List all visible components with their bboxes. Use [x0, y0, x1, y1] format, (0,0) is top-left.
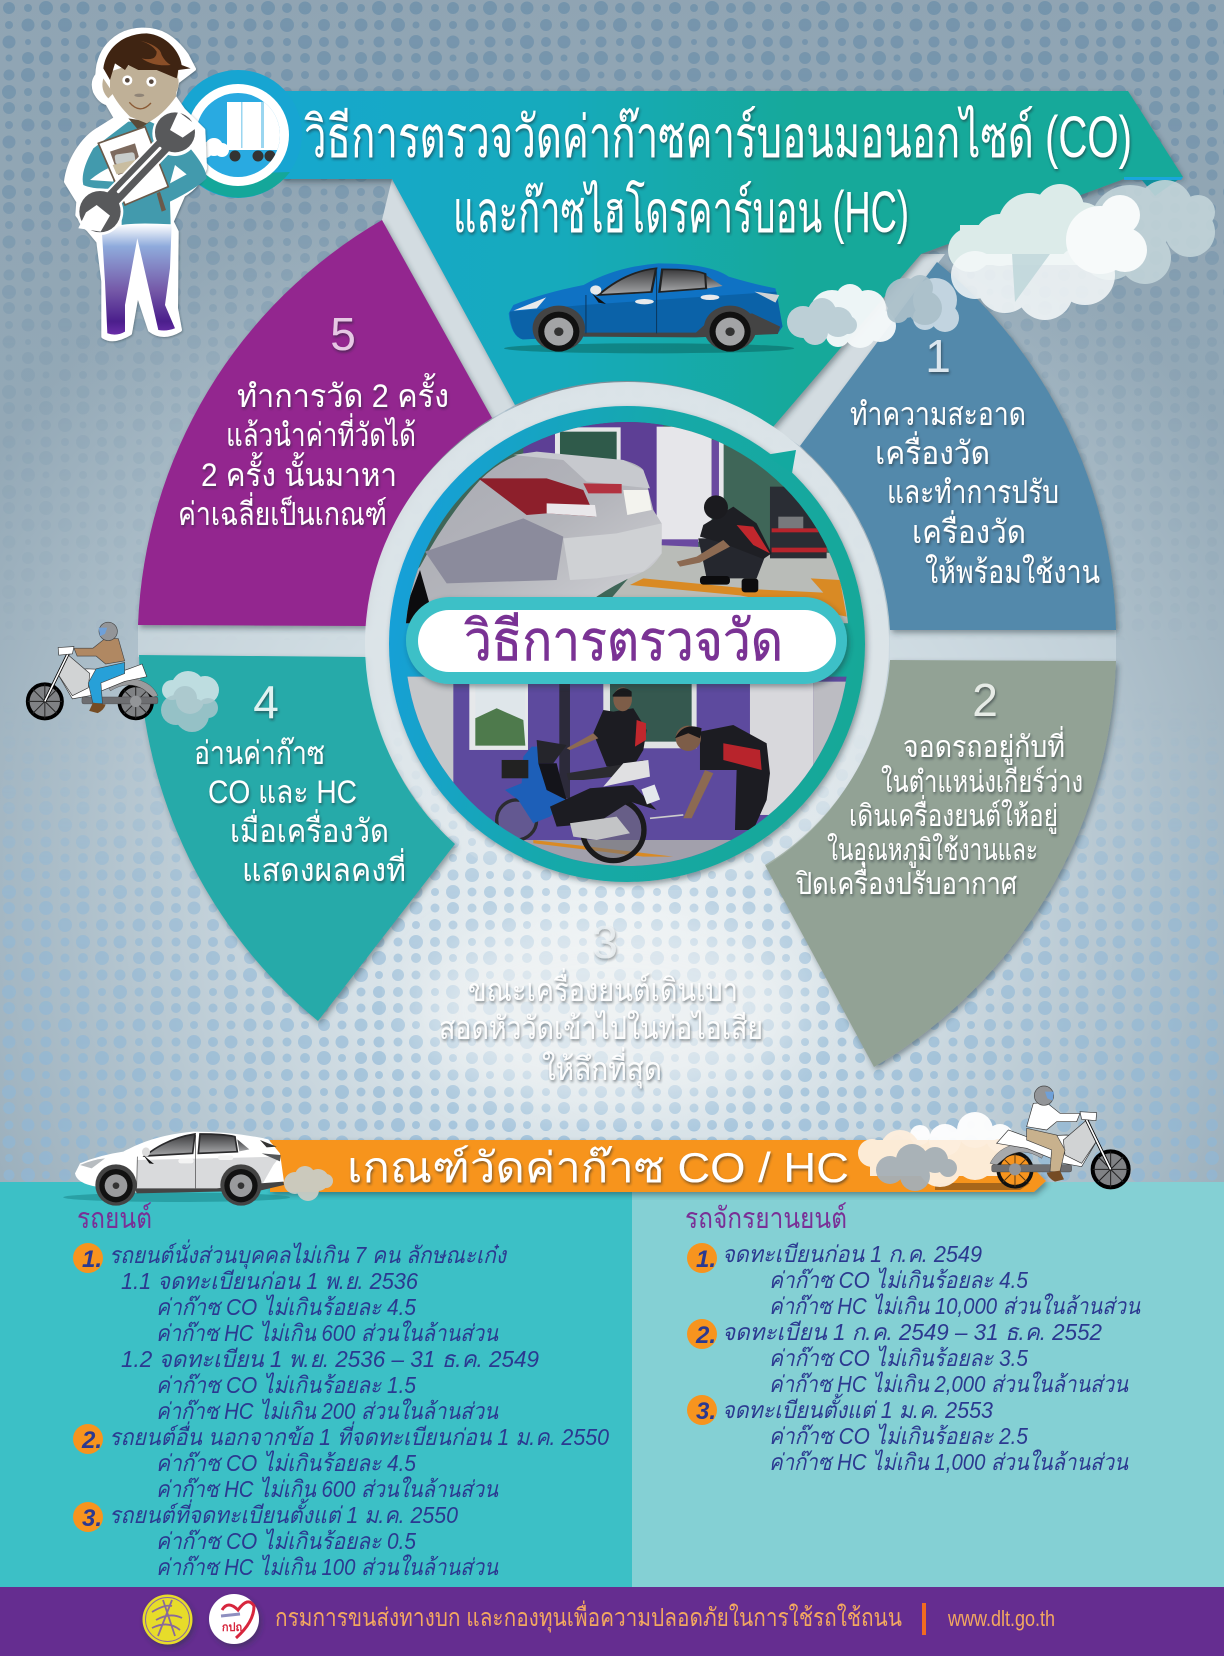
icon: badge 2: 2.: [695, 1322, 716, 1349]
icon: badge 1: [687, 1243, 717, 1273]
banner: criteria heading: [270, 1140, 1046, 1192]
panel: title banner: [281, 91, 1183, 427]
text: step 2: 2: [972, 674, 998, 726]
text: motorcycle criteria: จดทะเบียนตั้งแต่ 1 ม.ค. 2553: [722, 1393, 993, 1423]
text: step 5: 2 ครั้ง นั้นมาหา: [201, 452, 397, 493]
text: step 4: อ่านค่าก๊าซ: [194, 735, 325, 771]
panel: car criteria background: [0, 1182, 632, 1587]
text: step 2: ในอุณหภูมิใช้งานและ: [827, 833, 1038, 869]
text: step 2: เดินเครื่องยนต์ให้อยู่: [849, 795, 1058, 834]
panel: step 2 petal: [765, 660, 1116, 1067]
text: step 4: แสดงผลคงที่: [242, 848, 406, 888]
text: step 2: ปิดเครื่องปรับอากาศ: [795, 863, 1017, 901]
text: car criteria: รถยนต์นั่งส่วนบุคคลไม่เกิน 7 คน ลักษณะเก๋ง: [109, 1239, 508, 1269]
text: car criteria: ค่าก๊าซ HC ไม่เกิน 600 ส่วนในล้านส่วน: [156, 1320, 499, 1346]
icon: badge 2: [73, 1424, 103, 1454]
banner: method label pill: วิธีการตรวจวัด: [464, 609, 783, 672]
text: step 2: [795, 674, 1083, 901]
icon: badge 1: [73, 1243, 103, 1273]
text: motorcycle criteria: จดทะเบียน 1 ก.ค. 2549 – 31 ธ.ค. 2552: [722, 1319, 1102, 1345]
icon: road safety fund logo: [209, 1594, 259, 1644]
text: motorcycle criteria: จดทะเบียนก่อน 1 ก.ค. 2549: [722, 1241, 982, 1267]
text: motorcycle criteria: ค่าก๊าซ CO ไม่เกินร้อยละ 3.5: [769, 1345, 1028, 1371]
photo: car emission test: [406, 422, 848, 624]
banner: method label pill: [406, 597, 847, 684]
text: step 4: CO และ HC: [208, 774, 357, 810]
text: step 1: ให้พร้อมใช้งาน: [925, 554, 1100, 590]
icon: badge 3: 3.: [696, 1398, 716, 1425]
text: step 5: แล้วนำค่าที่วัดได้: [226, 413, 416, 453]
title: [304, 104, 1132, 245]
icon: badge 1: 1.: [82, 1246, 102, 1273]
panel: step 5 petal: [138, 220, 492, 626]
text: car criteria: รถยนต์: [77, 1202, 152, 1235]
text: step 1: [850, 330, 1100, 590]
footer bar: [0, 1587, 1224, 1656]
icon: ring arrow tip: [765, 450, 796, 473]
text: step 3: [439, 916, 763, 1089]
icon: badge 3: 3.: [82, 1505, 102, 1532]
icon: exhaust clouds from blue car: [787, 275, 959, 348]
text: motorcycle criteria: ค่าก๊าซ CO ไม่เกินร้อยละ 2.5: [769, 1423, 1028, 1449]
icon: right motorcycle rider: [990, 1086, 1129, 1187]
panel: step 1 petal: [800, 262, 1116, 630]
icon: badge 3: [73, 1502, 103, 1532]
text: organisation names: กรมการขนส่งทางบก และกองทุนเพื่อความปลอดภัยในการใช้รถใช้ถนน: [275, 1600, 902, 1633]
text: motorcycle criteria: [685, 1202, 1141, 1475]
text: car criteria: [73, 1202, 609, 1580]
text: step 1: เครื่องวัด: [875, 431, 990, 471]
text: motorcycle criteria: ค่าก๊าซ CO ไม่เกินร้อยละ 4.5: [769, 1267, 1028, 1293]
text: step 3: สอดหัววัดเข้าไปในท่อไอเสีย: [439, 1010, 763, 1046]
photo: motorcycle emission test: [407, 676, 847, 866]
icon: road safety fund logo: กปถ: [222, 1621, 242, 1634]
icon: blue car: [504, 263, 794, 353]
icon: badge 3: [687, 1395, 717, 1425]
text: car criteria: ค่าก๊าซ CO ไม่เกินร้อยละ 4.5: [156, 1450, 416, 1476]
text: step 3: 3: [592, 916, 618, 968]
circle: photo medallion: [365, 382, 889, 906]
text: car criteria: รถยนต์ที่จดทะเบียนตั้งแต่ 1 ม.ค. 2550: [109, 1498, 458, 1528]
text: step 1: 1: [925, 330, 951, 382]
text: step 1: เครื่องวัด: [912, 510, 1026, 550]
text: step 5: ค่าเฉลี่ยเป็นเกณฑ์: [178, 492, 387, 532]
text: step 4: เมื่อเครื่องวัด: [230, 809, 389, 849]
text: car criteria: 1.1 จดทะเบียนก่อน 1 พ.ย. 2536: [121, 1268, 418, 1294]
text: car criteria: รถยนต์อื่น นอกจากข้อ 1 ที่จดทะเบียนก่อน 1 ม.ค. 2550: [109, 1421, 609, 1450]
text: step 5: [178, 308, 449, 532]
icon: badge 1: 1.: [696, 1246, 716, 1273]
icon: department seal: [142, 1594, 192, 1644]
icon: white car smoke: [284, 1166, 333, 1201]
icon: heading smoke: [858, 1112, 1016, 1191]
icon: mechanic character: [66, 30, 207, 339]
text: motorcycle criteria: ค่าก๊าซ HC ไม่เกิน 2,000 ส่วนในล้านส่วน: [769, 1371, 1129, 1397]
text: step 2: ในตำแหน่งเกียร์ว่าง: [881, 765, 1083, 799]
text: step 3: ให้ลึกที่สุด: [542, 1047, 662, 1089]
text: step 1: และทำการปรับ: [887, 474, 1059, 510]
text: step 2: จอดรถอยู่กับที่: [903, 726, 1065, 765]
banner: criteria heading: เกณฑ์วัดค่าก๊าซ CO / HC: [347, 1144, 849, 1191]
background: [0, 0, 1224, 1182]
text: step 3: ขณะเครื่องยนต์เดินเบา: [468, 968, 738, 1008]
text: car criteria: ค่าก๊าซ CO ไม่เกินร้อยละ 4.5: [156, 1294, 416, 1320]
panel: motorcycle criteria background: [632, 1182, 1224, 1587]
icon: large smoke cloud: [948, 180, 1215, 320]
title: และก๊าซไฮโดรคาร์บอน (HC): [453, 179, 909, 245]
text: step 1: ทำความสะอาด: [850, 396, 1026, 432]
text: step 5: 5: [330, 308, 356, 360]
icon: truck badge: [182, 70, 290, 198]
icon: badge 2: [687, 1319, 717, 1349]
text: step 4: 4: [253, 676, 279, 728]
text: car criteria: ค่าก๊าซ CO ไม่เกินร้อยละ 0.5: [156, 1528, 416, 1554]
text: motorcycle criteria: รถจักรยานยนต์: [685, 1202, 847, 1235]
text: car criteria: ค่าก๊าซ HC ไม่เกิน 100 ส่วนในล้านส่วน: [156, 1554, 499, 1580]
icon: left motorcycle rider: [28, 622, 158, 718]
text: website: www.dlt.go.th: [947, 1606, 1055, 1631]
text: step 5: ทำการวัด 2 ครั้ง: [237, 373, 449, 414]
text: car criteria: ค่าก๊าซ HC ไม่เกิน 200 ส่วนในล้านส่วน: [156, 1398, 499, 1424]
text: motorcycle criteria: ค่าก๊าซ HC ไม่เกิน 10,000 ส่วนในล้านส่วน: [769, 1293, 1141, 1319]
text: car criteria: ค่าก๊าซ HC ไม่เกิน 600 ส่วนในล้านส่วน: [156, 1476, 499, 1502]
icon: left motorcycle smoke: [161, 671, 219, 732]
text: motorcycle criteria: ค่าก๊าซ HC ไม่เกิน 1,000 ส่วนในล้านส่วน: [769, 1449, 1129, 1475]
text: car criteria: ค่าก๊าซ CO ไม่เกินร้อยละ 1.5: [156, 1372, 416, 1398]
icon: white car: [63, 1132, 290, 1206]
text: step 4: [194, 676, 406, 888]
panel: step 4 petal: [139, 655, 455, 1021]
text: car criteria: 1.2 จดทะเบียน 1 พ.ย. 2536 – 31 ธ.ค. 2549: [121, 1346, 539, 1372]
icon: badge 2: 2.: [81, 1427, 102, 1454]
